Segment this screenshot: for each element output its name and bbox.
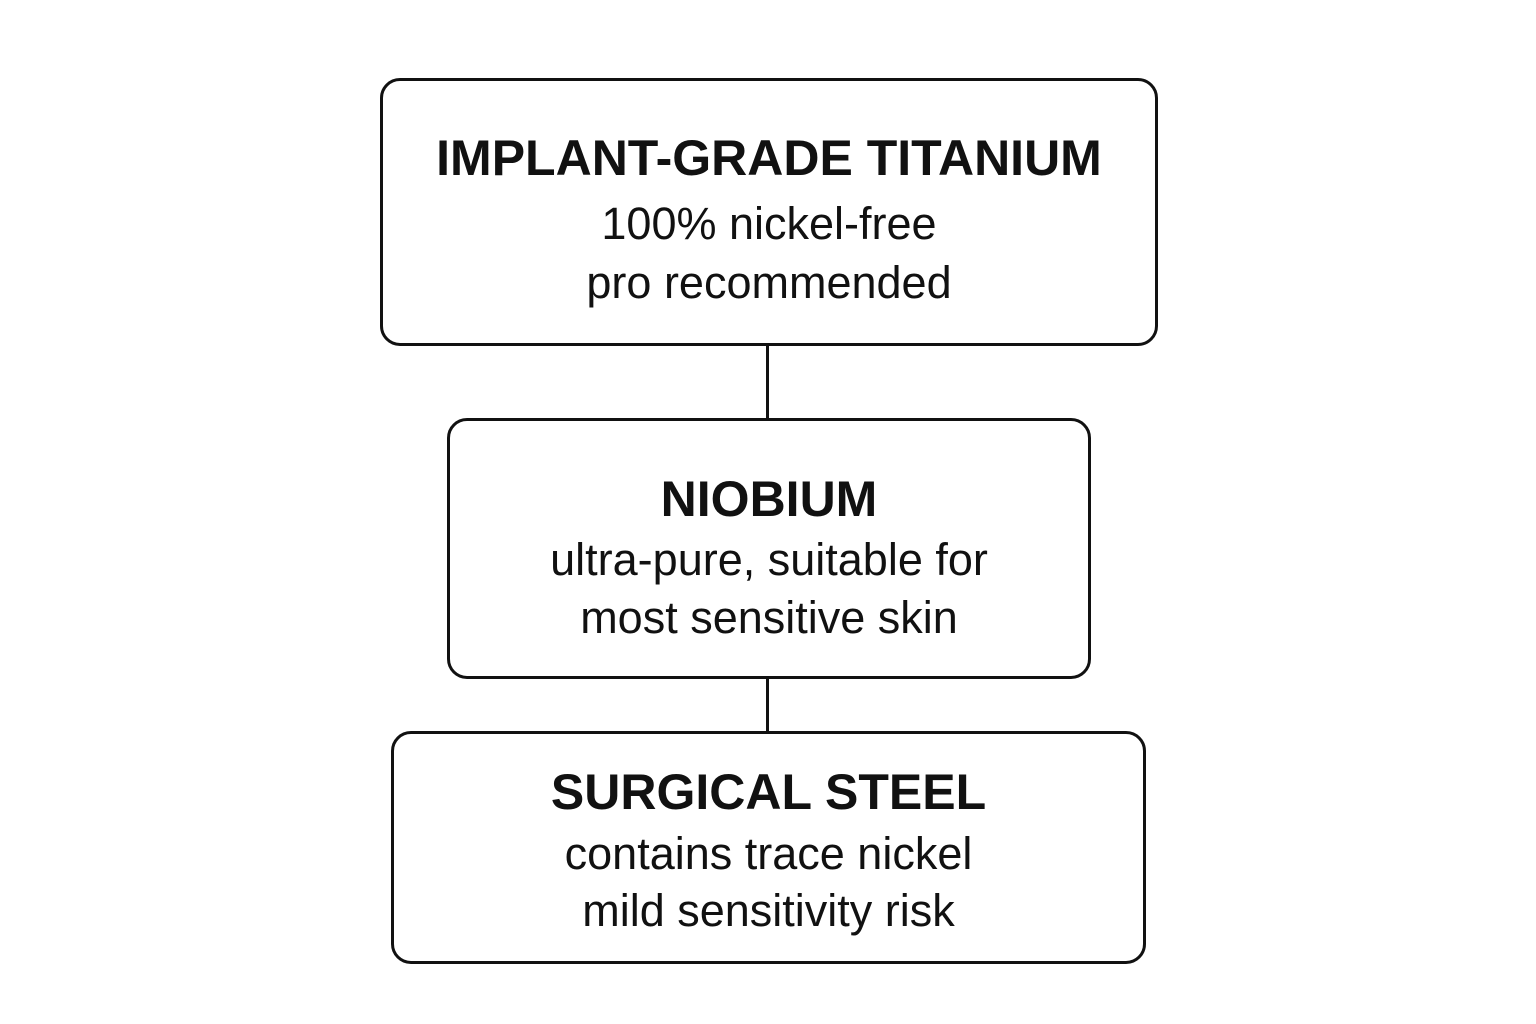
text: titanium details: pro recommended [586,257,952,308]
text: niobium details: most sensitive skin [580,592,958,643]
heading: titanium: IMPLANT-GRADE TITANIUM [436,130,1102,186]
box: surgical steel [391,731,1146,964]
text: titanium details [586,198,952,308]
arrow: connector 1 [766,346,769,418]
arrow: connector 2 [766,679,769,731]
text: niobium details: ultra-pure, suitable for [550,534,988,585]
box: niobium [447,418,1091,679]
heading: surgical steel: SURGICAL STEEL [551,764,986,820]
heading: niobium: NIOBIUM [661,471,877,527]
text: steel details: mild sensitivity risk [582,885,955,936]
text: steel details: contains trace nickel [565,828,972,879]
box: implant-grade titanium [380,78,1158,346]
text: titanium details: 100% nickel-free [601,198,937,249]
text: steel details [565,828,972,936]
text: niobium details [550,534,988,643]
